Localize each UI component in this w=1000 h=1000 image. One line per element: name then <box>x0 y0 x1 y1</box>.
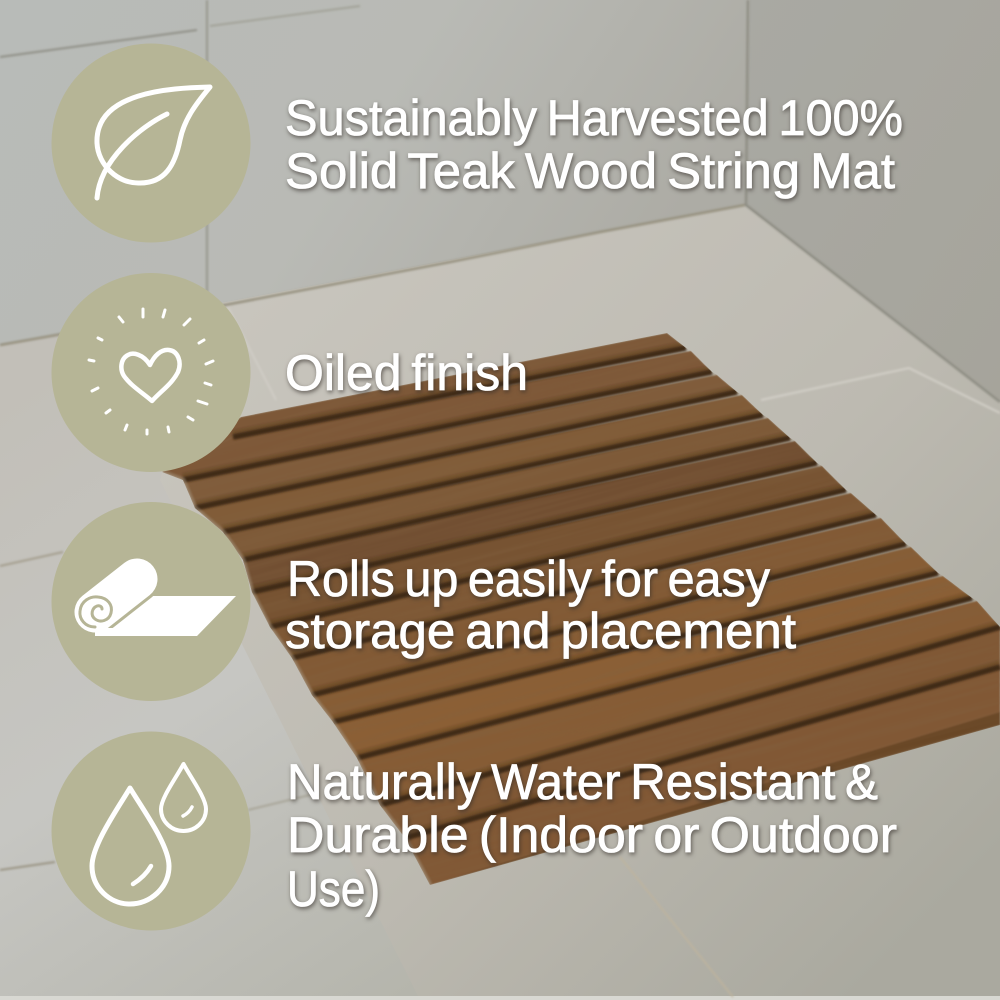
icon badge: water drops <box>52 732 250 930</box>
feature text: rolls up easily <box>285 551 796 659</box>
feature text: sustainably harvested: Sustainably Harvested 100% <box>285 90 903 146</box>
icon badge: heart with rays <box>52 273 250 472</box>
feature text: water resistant and durable: Naturally Water Resistant & <box>287 754 878 810</box>
feature text: sustainably harvested: Solid Teak Wood String Mat <box>285 143 895 199</box>
icon badge: leaf <box>52 44 250 242</box>
feature text: rolls up easily: storage and placement <box>285 603 796 659</box>
teak wood string mat photo <box>150 330 1000 890</box>
feature text: oiled finish: Oiled finish <box>285 345 528 401</box>
feature text: rolls up easily: Rolls up easily for easy <box>287 551 770 607</box>
feature text: water resistant and durable: Durable (Indoor or Outdoor <box>287 807 897 863</box>
icon badge: rolled mat <box>52 502 250 701</box>
feature text: sustainably harvested <box>285 90 903 199</box>
feature text: water resistant and durable <box>287 754 897 917</box>
feature text: water resistant and durable: Use) <box>287 861 380 917</box>
